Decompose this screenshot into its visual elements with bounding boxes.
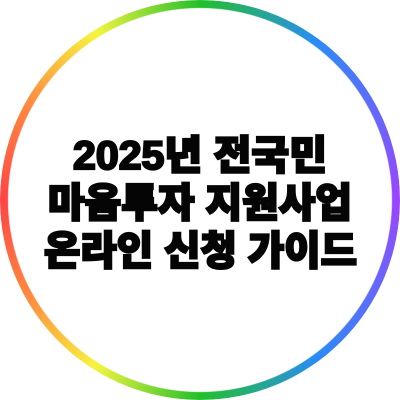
title line 2: 마음투자 지원사업 (48, 182, 352, 226)
title line 3: 온라인 신청 가이드 (44, 230, 357, 274)
title line 1: 2025년 전국민 (73, 134, 327, 178)
